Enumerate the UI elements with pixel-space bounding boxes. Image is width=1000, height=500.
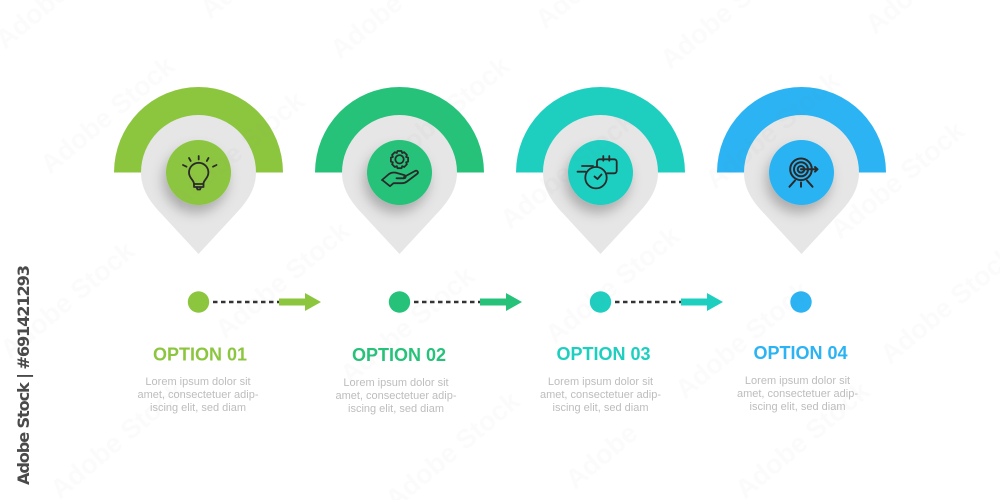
description: amet, consectetuer adip-: [137, 389, 259, 401]
arc: teal: [516, 87, 685, 172]
badge: green circle: [166, 140, 231, 205]
timeline step 1: [188, 291, 321, 313]
card 2: option 02: [315, 87, 484, 254]
pin: grey marker: [342, 115, 457, 254]
dot: [590, 291, 611, 313]
description: iscing elit, sed diam: [348, 403, 444, 415]
watermark pattern: Adobe Stock: [370, 50, 516, 180]
timeline step 2: [389, 291, 522, 313]
arrow: [279, 293, 321, 311]
dotted connector: [213, 301, 280, 303]
arc: green: [114, 87, 283, 172]
watermark pattern: Adobe Stock: [165, 85, 311, 215]
watermark pattern: Adobe Stock: [495, 105, 641, 235]
watermark pattern: Adobe Stock: [210, 215, 356, 345]
card 4: option 04: [717, 87, 886, 254]
description: Lorem ipsum dolor sit: [343, 377, 449, 389]
heading: OPTION 02: [352, 345, 446, 365]
arrow: [681, 293, 723, 311]
badge: blue circle: [769, 140, 834, 205]
badge: emerald circle: [367, 140, 432, 205]
description: amet, consectetuer adip-: [737, 388, 858, 400]
description: iscing elit, sed diam: [552, 402, 648, 414]
dot: [389, 291, 410, 313]
heading: OPTION 04: [753, 343, 848, 363]
pin: grey marker: [141, 115, 256, 254]
arc: sky blue: [717, 87, 886, 172]
timeline step 4 dot: [790, 291, 812, 313]
icon: light bulb: [183, 156, 216, 190]
watermark pattern: Adobe Stock: [700, 65, 846, 195]
dotted connector: [615, 301, 682, 303]
arc: emerald: [315, 87, 484, 172]
stock id label: Adobe Stock | #691421293: [14, 265, 34, 485]
watermark pattern: Adobe Stock: [35, 50, 181, 180]
badge: teal circle: [568, 140, 633, 205]
dot: [188, 291, 209, 313]
card 1: option 01: [114, 87, 283, 254]
text block 4: [737, 343, 858, 413]
pin: grey marker: [744, 115, 859, 254]
watermark pattern: Adobe Stock: [825, 115, 971, 245]
arrow: [480, 293, 522, 311]
description: iscing elit, sed diam: [150, 402, 246, 414]
pin: grey marker: [543, 115, 658, 254]
text block 3: [540, 344, 661, 414]
heading: OPTION 01: [153, 344, 247, 364]
icon: clock and calendar: [578, 156, 617, 188]
watermark pattern: Adobe Stock: [335, 260, 481, 390]
icon: target: [790, 158, 818, 187]
icon: hand holding gear: [382, 151, 418, 186]
timeline step 3: [590, 291, 723, 313]
description: Lorem ipsum dolor sit: [745, 375, 850, 387]
text block 1: [137, 344, 259, 414]
dotted connector: [414, 301, 481, 303]
description: amet, consectetuer adip-: [335, 390, 457, 402]
heading: OPTION 03: [556, 344, 651, 364]
description: Lorem ipsum dolor sit: [145, 376, 251, 388]
watermark pattern: Adobe Stock: [540, 220, 686, 350]
description: iscing elit, sed diam: [750, 401, 846, 413]
watermark pattern: Adobe Stock: [670, 275, 816, 405]
description: Lorem ipsum dolor sit: [548, 376, 653, 388]
text block 2: [335, 345, 457, 415]
description: amet, consectetuer adip-: [540, 389, 661, 401]
card 3: option 03: [516, 87, 685, 254]
watermark pattern: Adobe: [560, 418, 643, 495]
